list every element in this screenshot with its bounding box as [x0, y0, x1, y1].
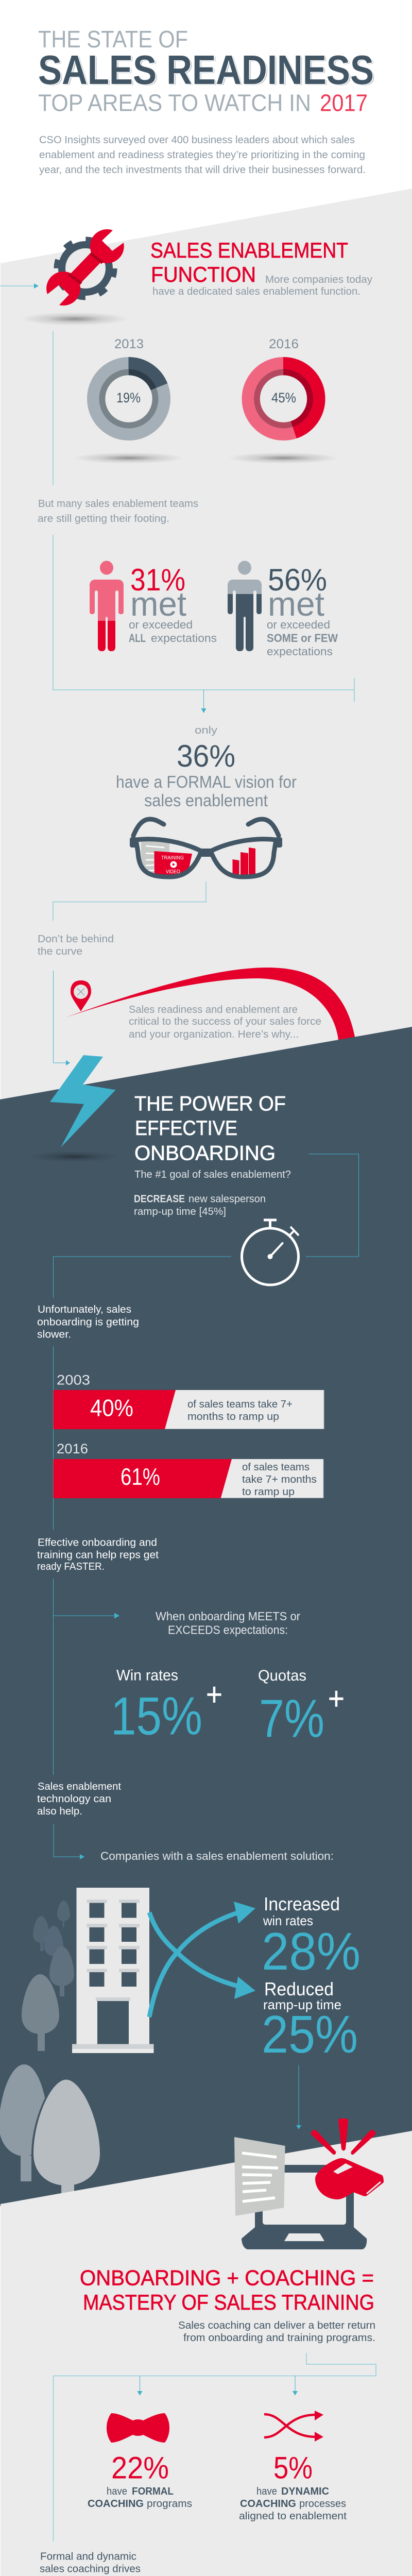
- icon: glasses with training video and bar chart: VIDEO: [166, 869, 180, 875]
- chart: donut 2013 19%: [73, 337, 184, 464]
- icon: lightning bolt: [27, 1055, 120, 1162]
- bar: 2003 40%: months to ramp up: [187, 1411, 279, 1422]
- text: sales readiness critical: [129, 1004, 321, 1040]
- bar: 2016 61%: [54, 1441, 323, 1498]
- stat: increased win rates 28%: [262, 1893, 360, 1981]
- stat: 31% met all expectations: met: [130, 585, 186, 623]
- stat: increased win rates 28%: 28%: [262, 1922, 360, 1981]
- stat: 5% dynamic coaching: DYNAMIC: [281, 2486, 329, 2497]
- stat: 56% met some or few expectations: or exceeded: [267, 618, 330, 631]
- stat: reduced ramp-up time 25%: [262, 1978, 358, 2064]
- stat: quotas 7%: +: [328, 1681, 345, 1717]
- text: effective onboarding helps: ready FASTER.: [37, 1561, 105, 1572]
- icon: wrench and gear: [21, 229, 129, 326]
- text: sales readiness critical: critical to the success of your sales force: [129, 1016, 321, 1027]
- icon: red curve with location pin: [65, 968, 356, 1046]
- connector to lightning bolt: [54, 971, 70, 1065]
- text: sales coaching return: [178, 2320, 375, 2344]
- intro paragraph: enablement and readiness strategies they’re prioritizing in the coming: [39, 149, 365, 161]
- stat: 56% met some or few expectations: expectations: [267, 645, 333, 658]
- bar: 2016 61%: to ramp up: [242, 1486, 295, 1498]
- connector: arrow to companies text: [54, 1824, 84, 1859]
- text: number one goal: DECREASE: [134, 1193, 185, 1205]
- heading: onboarding + coaching: [80, 2266, 374, 2314]
- connector: arrow to meets or exceeds: [54, 1579, 119, 1775]
- text: formal and dynamic: sales coaching drives: [40, 2564, 141, 2575]
- panel: power of effective onboarding: [0, 1027, 412, 2206]
- stat: 5% dynamic coaching: aligned to enablement: [239, 2511, 347, 2522]
- stat: 22% formal coaching: FORMAL: [132, 2486, 174, 2497]
- heading: sales enablement function: have a dedicated sales enablement function.: [152, 286, 360, 297]
- bar: 2003 40%: 40%: [90, 1395, 133, 1421]
- text: technology can help: also help.: [37, 1806, 82, 1817]
- text: effective onboarding helps: Effective onboarding and: [38, 1537, 157, 1549]
- text: effective onboarding helps: [37, 1537, 159, 1572]
- icon: laptop with document and whistle: [234, 2119, 384, 2249]
- panel: sales enablement function: [0, 189, 412, 1103]
- stat: increased win rates 28%: Increased: [264, 1893, 340, 1914]
- bar: 2003 40%: [54, 1372, 324, 1429]
- text: number one goal: ramp-up time [45%]: [134, 1206, 226, 1217]
- connector: branches to formal and dynamic: [54, 2353, 376, 2541]
- icon: stopwatch: [242, 1220, 299, 1285]
- icon: glasses with training video and bar chart: [130, 819, 282, 877]
- text: sales coaching return: from onboarding and training programs.: [183, 2332, 375, 2344]
- chart: donut 2013 19%: 2013: [114, 337, 144, 351]
- bar: 2016 61%: of sales teams: [242, 1462, 310, 1473]
- stat: reduced ramp-up time 25%: ramp-up time: [263, 1997, 341, 2012]
- connector lines: [53, 535, 354, 713]
- text: sales readiness critical: Sales readiness and enablement are: [129, 1004, 298, 1015]
- panel: onboarding + coaching: [1, 2119, 412, 2576]
- stat: 56% met some or few expectations: SOME or FEW: [267, 632, 338, 645]
- text: onboarding slower: [37, 1304, 139, 1341]
- chart: donut 2016 45%: 45%: [271, 390, 296, 405]
- stat: only 36% formal vision: have a FORMAL vision for: [116, 772, 297, 791]
- text: onboarding slower: onboarding is getting: [37, 1317, 139, 1328]
- text: when onboarding meets: [156, 1609, 300, 1636]
- arrow into wrench: [0, 283, 39, 289]
- text: footing: But many sales enablement teams: [38, 498, 198, 510]
- stat: 5% dynamic coaching: [239, 2411, 347, 2522]
- stat: 56% met some or few expectations: 56%: [268, 563, 327, 597]
- title: 2017: [320, 90, 368, 116]
- section: intro: [38, 26, 375, 176]
- heading: onboarding + coaching: MASTERY OF SALES TRAINING: [83, 2290, 374, 2314]
- stat: 31% met all expectations: expectations: [151, 632, 217, 645]
- arrow down to coaching: [296, 2065, 301, 2129]
- stat: 22% formal coaching: 22%: [111, 2451, 169, 2485]
- stat: quotas 7%: Quotas: [258, 1667, 306, 1684]
- text: behind the curve: the curve: [38, 946, 82, 957]
- title: THE STATE OF: [38, 26, 188, 53]
- heading: power of effective onboarding: THE POWER OF: [134, 1092, 286, 1115]
- title: [38, 26, 375, 116]
- stat: win rates 15%: 15%: [111, 1687, 202, 1747]
- heading: power of effective onboarding: ONBOARDING: [134, 1142, 276, 1164]
- stat: 31% met all expectations: or exceeded: [129, 618, 193, 631]
- stat: quotas 7%: 7%: [259, 1689, 324, 1749]
- bar: 2003 40%: 2003: [57, 1372, 90, 1388]
- stat: 31% met all expectations: [90, 561, 217, 651]
- stat: reduced ramp-up time 25%: 25%: [262, 2005, 358, 2064]
- bar: 2016 61%: 61%: [121, 1463, 160, 1490]
- heading: sales enablement function: [150, 238, 372, 297]
- chart: donut 2016 45%: 2016: [269, 337, 299, 351]
- text: behind the curve: Don’t be behind: [38, 934, 114, 945]
- illustration: building: [72, 1888, 153, 2053]
- heading: sales enablement function: SALES ENABLEMENT: [150, 238, 348, 262]
- stat: 22% formal coaching: programs: [147, 2498, 192, 2510]
- text: footing: are still getting their footing.: [38, 513, 169, 524]
- illustration: trees: [0, 1901, 102, 2195]
- text: onboarding slower: Unfortunately, sales: [38, 1304, 131, 1315]
- stat: increased win rates 28%: win rates: [263, 1913, 313, 1928]
- intro paragraph: [39, 134, 366, 176]
- text: companies with solution: Companies with a sales enablement solution:: [100, 1850, 334, 1862]
- stat: 22% formal coaching: COACHING: [88, 2498, 144, 2510]
- stat: 31% met all expectations: 31%: [130, 563, 185, 597]
- icon: crossing arrows: [149, 1902, 255, 2017]
- title: TOP AREAS TO WATCH IN: [38, 90, 311, 116]
- text: technology can help: Sales enablement: [38, 1781, 121, 1792]
- intro paragraph: year, and the tech investments that will drive their businesses forward.: [39, 164, 366, 176]
- bar: 2016 61%: 2016: [57, 1441, 88, 1456]
- stat: only 36% formal vision: [116, 725, 297, 810]
- text: number one goal: new salesperson: [188, 1193, 266, 1205]
- text: number one goal: [134, 1169, 291, 1217]
- text: formal and dynamic: Formal and dynamic: [40, 2551, 136, 2563]
- stat: quotas 7%: [258, 1667, 345, 1749]
- bar: 2016 61%: take 7+ months: [242, 1474, 317, 1485]
- stat: 5% dynamic coaching: processes: [299, 2498, 346, 2510]
- heading: sales enablement function: More companies today: [265, 274, 372, 285]
- stat: only 36% formal vision: 36%: [177, 739, 235, 773]
- text: when onboarding meets: EXCEEDS expectations:: [168, 1623, 288, 1636]
- text: footing: [38, 498, 198, 524]
- text: onboarding slower: slower.: [37, 1329, 71, 1341]
- stat: 31% met all expectations: ALL: [129, 632, 146, 645]
- stat: 56% met some or few expectations: [228, 561, 338, 658]
- text: technology can help: [37, 1781, 121, 1817]
- stat: reduced ramp-up time 25%: Reduced: [264, 1978, 334, 1999]
- icon: glasses with training video and bar chart: TRAINING: [161, 855, 184, 861]
- stat: 22% formal coaching: have: [107, 2486, 127, 2497]
- stat: only 36% formal vision: sales enablement: [144, 791, 268, 810]
- text: effective onboarding helps: training can help reps get: [37, 1550, 159, 1561]
- stat: 5% dynamic coaching: 5%: [273, 2451, 313, 2485]
- text: technology can help: technology can: [37, 1793, 111, 1805]
- heading: sales enablement function: FUNCTION: [151, 262, 256, 286]
- stat: 5% dynamic coaching: COACHING: [240, 2498, 296, 2510]
- stat: win rates 15%: Win rates: [116, 1667, 178, 1684]
- chart: donut 2013 19%: 19%: [116, 390, 141, 405]
- stat: 5% dynamic coaching: have: [256, 2486, 277, 2497]
- text: behind the curve: [38, 934, 114, 957]
- intro paragraph: CSO Insights surveyed over 400 business leaders about which sales: [39, 134, 355, 146]
- stat: 56% met some or few expectations: met: [268, 585, 324, 623]
- heading: onboarding + coaching: ONBOARDING + COACHING =: [80, 2266, 374, 2290]
- stat: 22% formal coaching: [88, 2413, 192, 2510]
- heading: power of effective onboarding: EFFECTIVE: [135, 1117, 237, 1140]
- heading: power of effective onboarding: [134, 1092, 286, 1164]
- text: formal and dynamic: [40, 2551, 141, 2576]
- text: number one goal: The #1 goal of sales enablement?: [134, 1169, 291, 1180]
- text: when onboarding meets: When onboarding MEETS or: [156, 1609, 300, 1623]
- text: sales readiness critical: and your organization. Here’s why...: [129, 1029, 299, 1040]
- stat: win rates 15%: +: [206, 1677, 222, 1713]
- stat: only 36% formal vision: only: [195, 725, 217, 736]
- bar: 2003 40%: of sales teams take 7+: [187, 1399, 293, 1410]
- chart: donut 2016 45%: [228, 337, 339, 464]
- text: sales coaching return: Sales coaching can deliver a better return: [178, 2320, 375, 2331]
